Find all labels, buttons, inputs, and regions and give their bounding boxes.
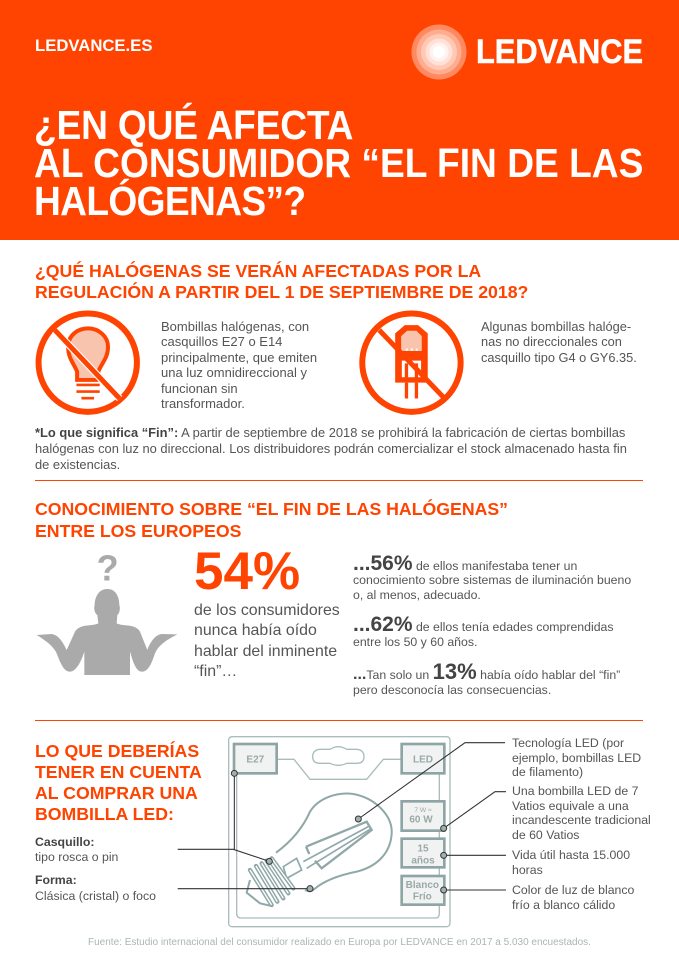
text: shape: Forma: [35,873,77,887]
text: lifetime: horas [512,863,543,877]
stat: 13 percent: ...Tan solo un 13% había oído hablar del “fin” [353,659,620,684]
text: shape: Clásica (cristal) o foco [35,888,156,902]
text: base [35,834,118,864]
text: capsule description [481,318,637,364]
heading: REGULACIÓN A PARTIR DEL 1 DE SEPTIEMBRE DE 2018? [35,282,528,302]
heading: BOMBILLA LED: [35,804,174,824]
text: capsule description: casquillo tipo G4 o GY6.35. [481,350,637,364]
diagram: bulb package [178,736,506,928]
text: wattage: incandescente tradicional [512,813,651,827]
title: ¿EN QUÉ AFECTA [34,102,353,148]
heading: ENTRE LOS EUROPEOS [35,521,241,541]
label boxes: E27 [246,754,265,765]
label boxes: Blanco [406,880,439,891]
stat: 13 percent: pero desconocía las consecuencias. [353,683,551,697]
heading [35,499,508,541]
label boxes: LED [413,754,433,765]
text: 54 percent description: nunca había oído [194,622,317,639]
website url: LEDVANCE.ES [35,36,152,55]
logo [412,24,643,80]
text: wattage: Una bombilla LED de 7 [512,784,638,798]
text: bulb description: funcionan sin [161,380,238,396]
label boxes: 7 W ≈ [414,807,432,814]
text: 54 percent description [194,602,340,680]
icon: shrugging person: ? [97,548,119,589]
stat: 13 percent [353,659,620,697]
stat: 56 percent [353,552,631,602]
heading: CONOCIMIENTO SOBRE “EL FIN DE LAS HALÓGENAS” [35,499,508,519]
stat: 62 percent: ...62% de ellos tenía edades comprendidas [353,613,614,636]
text: bulb description: transformador. [161,396,245,411]
panel: header [0,0,679,240]
label boxes: años [411,855,435,866]
stat: 56 percent: o, al menos, adecuado. [353,588,481,602]
heading: LO QUE DEBERÍAS [35,740,199,760]
text: wattage [512,784,651,842]
text: bulb description: Bombillas halógenas, con [161,318,309,334]
connector lines [178,743,506,893]
icon: shrugging person [36,548,178,675]
text: base: Casquillo: [35,834,94,848]
text: meaning of fin: de existencias. [35,457,120,472]
heading: ¿QUÉ HALÓGENAS SE VERÁN AFECTADAS POR LA [35,261,481,281]
label boxes: 60 W [409,815,433,826]
stat: 62 percent [353,613,614,649]
text: wattage: Vatios equivale a una [512,799,629,813]
text: 54 percent description: de los consumidores [194,602,340,619]
package outline [229,737,450,927]
text: LED technology [512,736,641,779]
text: LED technology: de filamento) [512,765,583,779]
text: bulb description: una luz omnidireccional y [161,365,307,380]
text: 54 percent description: “fin”… [194,663,237,680]
text: capsule description: Algunas bombillas halóge- [481,318,631,334]
label boxes: 15 [417,843,429,854]
heading: TENER EN CUENTA [35,762,202,782]
text: meaning of fin: halógenas con luz no direccional. Los distribuidores podrán comercializar el stock almacenado hasta fin [35,441,627,456]
heading: AL COMPRAR UNA [35,782,198,802]
panel: affected halogens [35,261,637,472]
text: bulb description: principalmente, que emiten [161,350,317,364]
text: 54 percent description: hablar del inminente [194,643,337,660]
text: meaning of fin: *Lo que significa “Fin”: A partir de septiembre de 2018 se prohibirá la fabricación de ciertas bombillas [35,425,625,440]
panel: knowledge [35,499,631,697]
text: colour [512,883,634,912]
icon: crossed-out bulb [36,310,140,415]
text: LED technology: ejemplo, bombillas LED [512,751,641,765]
text: LED technology: Tecnología LED (por [512,736,624,750]
label boxes: Frío [413,891,432,902]
text: lifetime [512,848,630,877]
text: bulb description [161,318,317,411]
logo: LEDVANCE [476,33,643,71]
text: capsule description: nas no direccionales con [481,334,622,349]
text: colour: frío a blanco cálido [512,898,615,912]
title: HALÓGENAS”? [34,178,305,224]
text: colour: Color de luz de blanco [512,883,634,897]
icon: crossed-out capsule [359,310,464,415]
text: bulb description: casquillos E27 o E14 [161,334,282,349]
heading [35,261,528,302]
title [34,102,643,224]
text: wattage: de 60 Vatios [512,828,579,842]
text: meaning of fin [35,425,627,472]
label boxes [234,744,444,905]
title: AL CONSUMIDOR “EL FIN DE LAS [34,140,643,186]
text: shape [35,873,156,902]
bulb drawing [247,794,392,906]
stat: 56 percent: ...56% de ellos manifestaba tener un [353,552,577,574]
heading [35,740,202,824]
stat: 62 percent: entre los 50 y 60 años. [353,635,477,649]
stat: 54 percent: 54% [194,542,300,601]
stat: 56 percent: conocimiento sobre sistemas de iluminación bueno [353,573,631,587]
text: base: tipo rosca o pin [35,850,118,864]
text: lifetime: Vida útil hasta 15.000 [512,848,630,862]
panel: buying a LED bulb [35,736,651,948]
source footnote: Fuente: Estudio internacional del consumidor realizado en Europa por LEDVANCE en 2017 a 5.030 encuestados. [88,937,591,948]
